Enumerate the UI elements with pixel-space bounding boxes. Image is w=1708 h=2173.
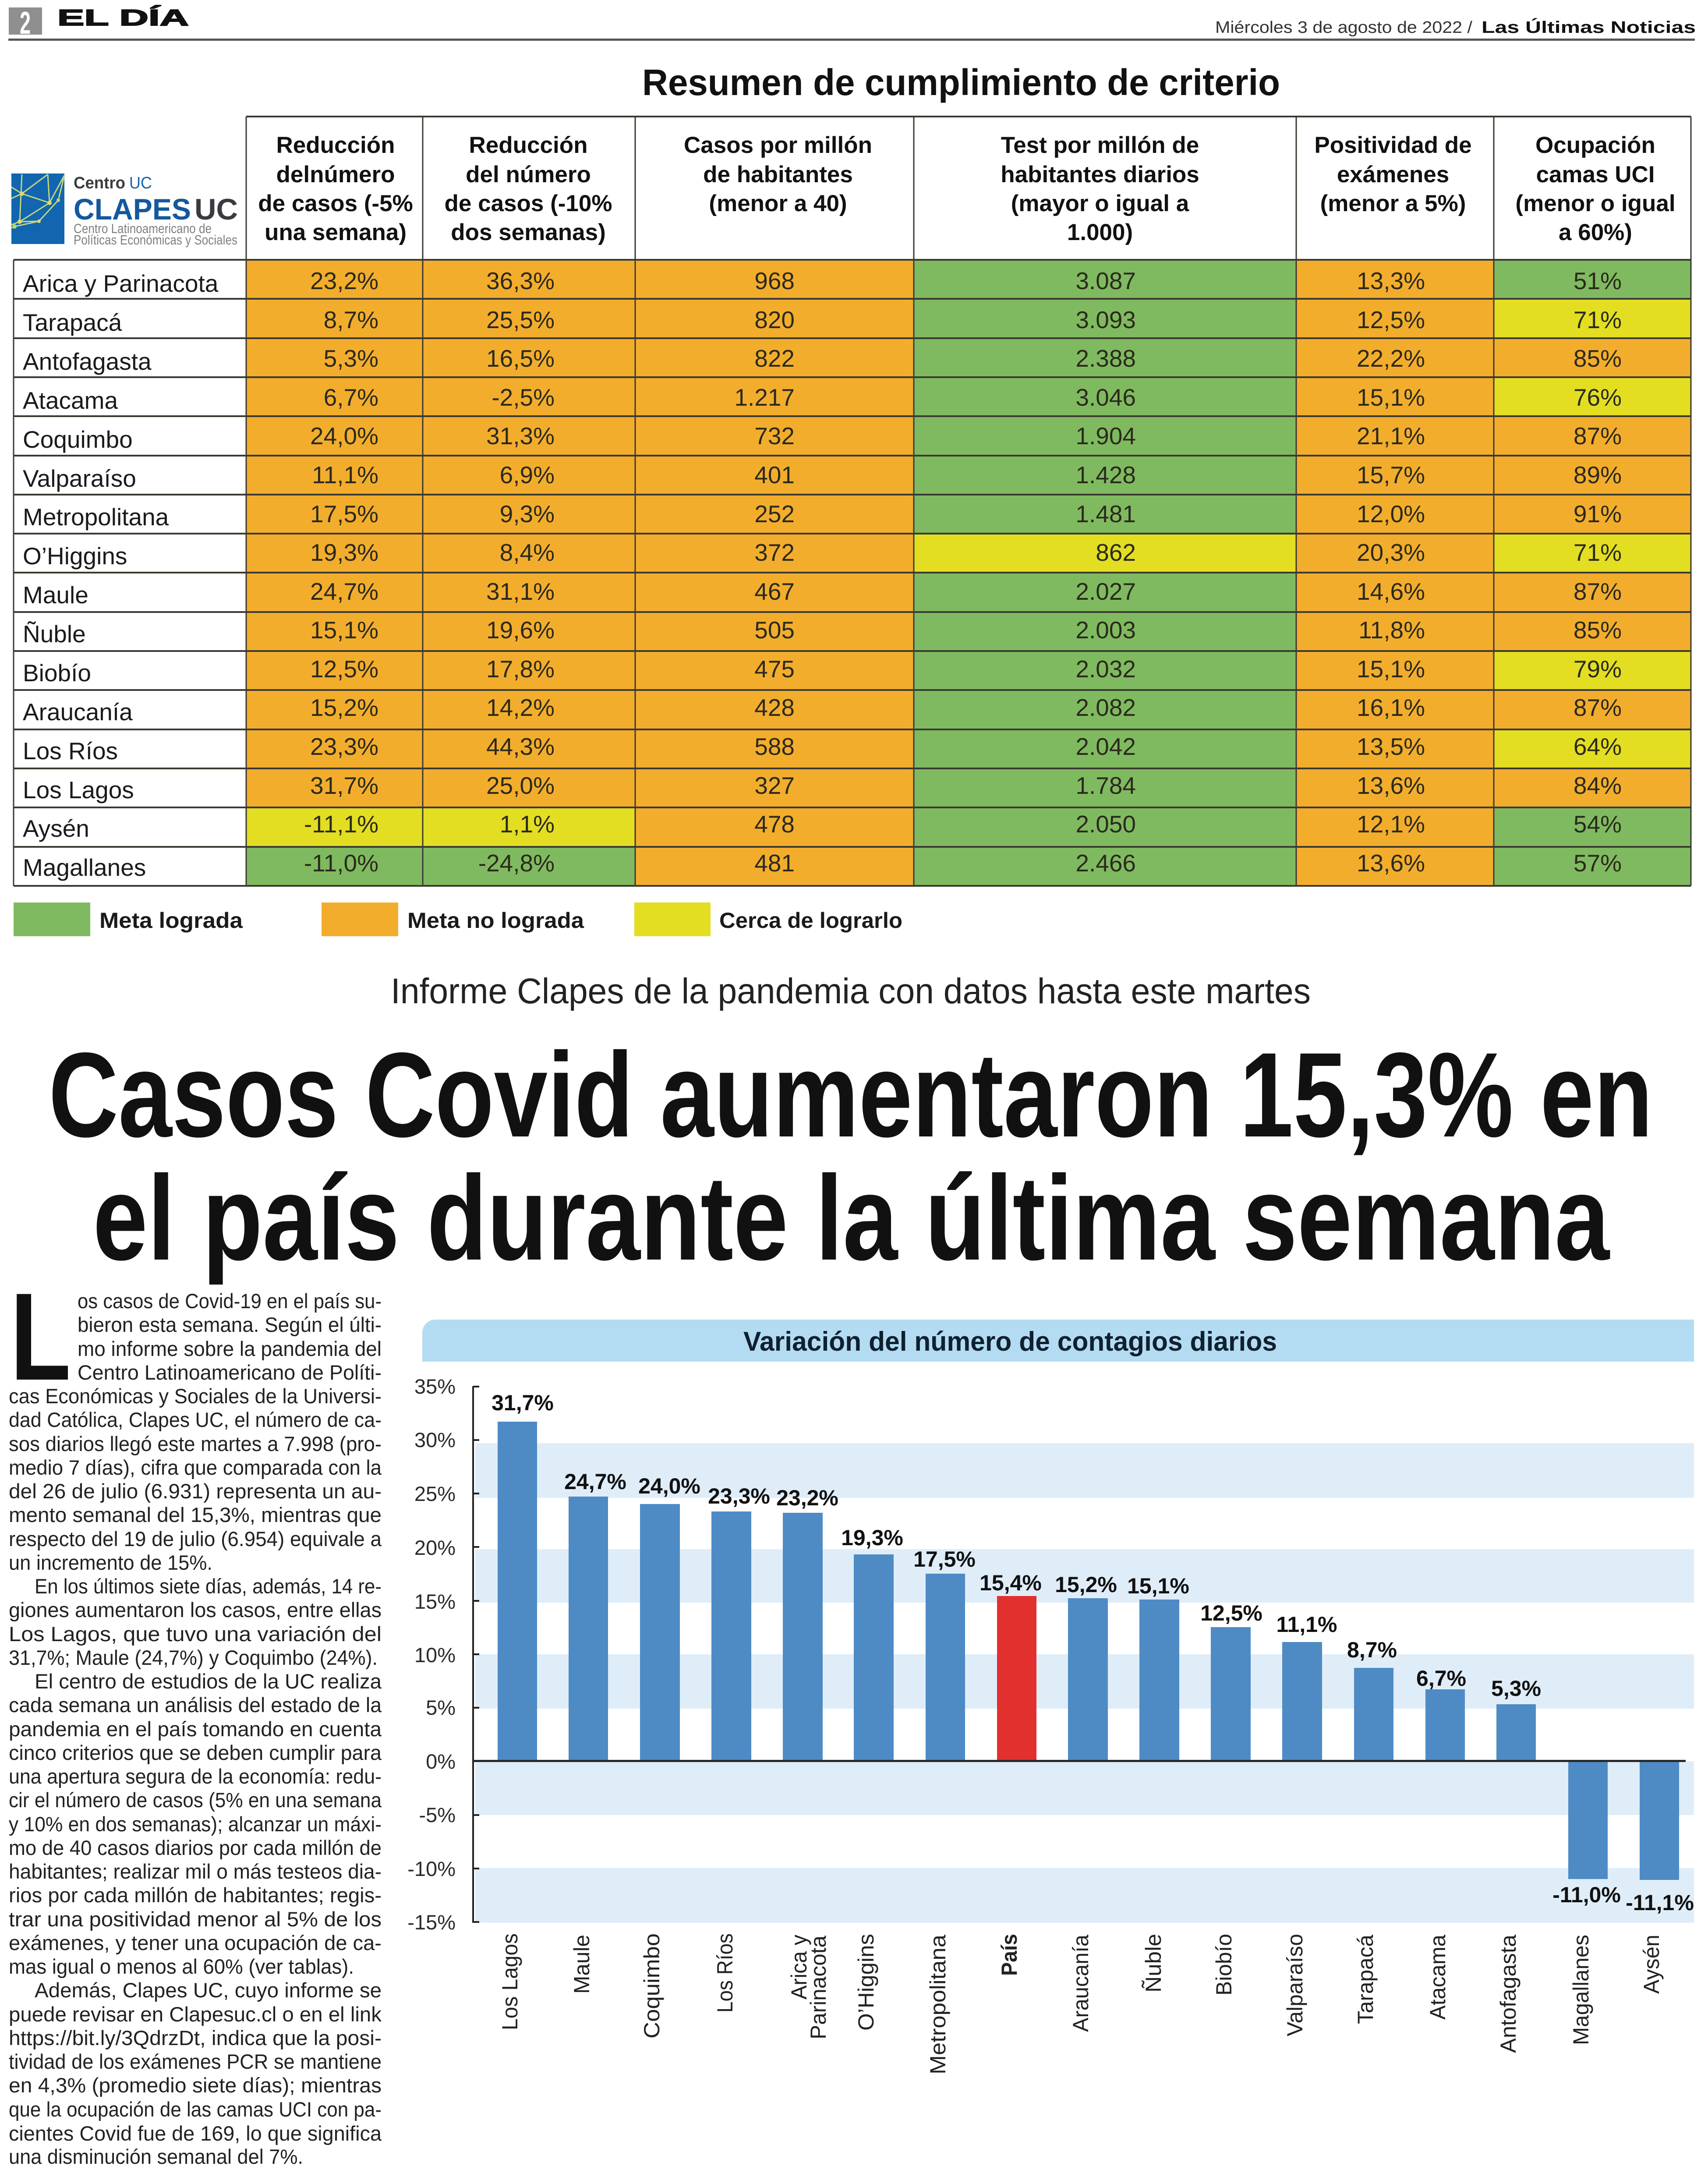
row: Arica y Parinacota: 968 xyxy=(754,267,795,294)
table headers: Test por millón de xyxy=(1001,132,1199,158)
logo: Clapes UC: Políticas Económicas y Sociales xyxy=(74,232,237,248)
row: Ñuble: 2.003 xyxy=(1075,616,1136,644)
y axis: 0% xyxy=(426,1750,456,1773)
value labels: 31,7% xyxy=(492,1391,554,1415)
category labels: Araucanía xyxy=(1068,1935,1093,2032)
paragraph 3: una apertura segura de la economía: redu- xyxy=(9,1765,382,1788)
value labels: 19,3% xyxy=(841,1525,903,1550)
background bands xyxy=(475,1443,1694,1923)
row: Los Lagos: 25,0% xyxy=(486,772,555,799)
row: Coquimbo: 1.904 xyxy=(1075,422,1136,449)
row: Arica y Parinacota: 23,2% xyxy=(310,267,378,294)
row: Aysén: Aysén xyxy=(23,815,89,842)
table headers: Casos por millón xyxy=(684,132,872,158)
row: Maule: 14,6% xyxy=(1357,578,1425,605)
chart: variation in daily infections xyxy=(407,1320,1694,2074)
logo mark xyxy=(11,173,64,244)
row: Metropolitana: Metropolitana xyxy=(23,503,169,531)
paragraph 4: en 4,3% (promedio siete días); mientras xyxy=(9,2074,382,2097)
row: Aysén: 12,1% xyxy=(1357,810,1425,838)
y axis: 5% xyxy=(426,1696,456,1719)
paragraph 3: mas igual o menos al 60% (ver tablas). xyxy=(9,1955,354,1978)
row: Metropolitana: 12,0% xyxy=(1357,500,1425,527)
logo: Clapes UC xyxy=(11,173,238,248)
table: criteria compliance by region xyxy=(14,117,1691,886)
row: Valparaíso: 11,1% xyxy=(312,461,378,488)
category labels: Tarapacá xyxy=(1353,1935,1378,2024)
paragraph 1: cas Económicas y Sociales de la Universi- xyxy=(9,1384,382,1408)
row: Aysén: 2.050 xyxy=(1075,810,1136,838)
paragraph 3: y 10% en dos semanas); alcanzar un máxi- xyxy=(9,1812,382,1836)
row: Valparaíso: 15,7% xyxy=(1357,461,1425,488)
paragraph 3 xyxy=(9,1670,382,1978)
row: Tarapacá: Tarapacá xyxy=(23,309,122,336)
value labels: 17,5% xyxy=(913,1547,976,1571)
paragraph 3: cinco criterios que se deben cumplir para xyxy=(9,1741,382,1764)
paragraph 1: mento semanal del 15,3%, mientras que xyxy=(9,1503,382,1526)
table headers: 1.000) xyxy=(1067,219,1133,245)
category labels: Arica y xyxy=(787,1935,811,2000)
row: Maule: 31,1% xyxy=(486,578,555,605)
row: Aysén: 478 xyxy=(754,810,795,838)
row: Araucanía xyxy=(23,694,1622,726)
paragraph 3: cir el número de casos (5% en una semana xyxy=(9,1788,382,1812)
category labels: Coquimbo xyxy=(640,1933,664,2039)
row: Ñuble: 505 xyxy=(754,616,795,644)
row: Maule: 2.027 xyxy=(1075,578,1136,605)
row: Coquimbo xyxy=(23,422,1622,453)
row: Los Ríos xyxy=(23,733,1622,764)
paragraph 3: trar una positividad menor al 5% de los xyxy=(9,1908,382,1931)
paragraph 2: En los últimos siete días, además, 14 re- xyxy=(35,1575,382,1598)
category labels: Metropolitana xyxy=(926,1935,950,2074)
row: Los Ríos: Los Ríos xyxy=(23,737,118,764)
row: Valparaíso xyxy=(23,461,1622,492)
paragraph 3: cada semana un análisis del estado de la xyxy=(9,1693,382,1716)
table headers: delnúmero xyxy=(276,162,395,188)
row: Antofagasta: 16,5% xyxy=(486,345,555,372)
legend: goal not achieved: Meta no lograda xyxy=(407,908,584,933)
row: Biobío: 475 xyxy=(754,655,795,683)
table title: Resumen de cumplimiento de criterio xyxy=(642,62,1280,103)
row: Metropolitana xyxy=(23,500,1622,531)
value labels: -11,0% xyxy=(1552,1883,1621,1907)
row: Maule: 87% xyxy=(1574,578,1622,605)
table headers: de casos (-5% xyxy=(258,191,413,216)
value labels: -11,1% xyxy=(1626,1890,1694,1915)
row: Los Ríos: 23,3% xyxy=(310,733,378,760)
page number box xyxy=(9,6,42,41)
value labels: 23,2% xyxy=(776,1486,838,1510)
row: Arica y Parinacota: 3.087 xyxy=(1075,267,1136,294)
table headers: Reducción xyxy=(469,132,587,158)
row: Coquimbo: Coquimbo xyxy=(23,426,133,453)
y axis xyxy=(407,1375,479,1934)
paragraph 1: medio 7 días), cifra que comparada con la xyxy=(9,1456,382,1479)
row: O'Higgins: 862 xyxy=(1096,539,1136,566)
row: Ñuble: 15,1% xyxy=(310,616,378,644)
y axis: -10% xyxy=(407,1857,456,1880)
headline xyxy=(49,1028,1653,1286)
table headers: de casos (-10% xyxy=(445,191,612,216)
legend: close to achieving xyxy=(634,902,902,936)
row: Atacama: 6,7% xyxy=(324,384,378,411)
category labels: Magallanes xyxy=(1569,1935,1593,2045)
value labels: 15,4% xyxy=(980,1571,1042,1595)
row: Coquimbo: 87% xyxy=(1574,422,1622,449)
row: Metropolitana: 17,5% xyxy=(310,500,378,527)
row: Valparaíso: 6,9% xyxy=(500,461,555,488)
legend: close to achieving: Cerca de lograrlo xyxy=(719,908,902,933)
category labels: Biobío xyxy=(1212,1934,1236,1996)
row: O'Higgins: 372 xyxy=(754,539,795,566)
row: O'Higgins: 8,4% xyxy=(500,539,555,566)
row: Los Ríos: 588 xyxy=(754,733,795,760)
row: Aysén: 1,1% xyxy=(500,810,555,838)
page number box: 2 xyxy=(20,6,31,41)
y axis: 20% xyxy=(414,1536,456,1559)
row: Biobío xyxy=(23,655,1622,687)
table headers: dos semanas) xyxy=(451,219,606,245)
row: Magallanes: 57% xyxy=(1574,849,1622,877)
row: Atacama: Atacama xyxy=(23,387,118,414)
row: Magallanes: 13,6% xyxy=(1357,849,1425,877)
category labels: Los Lagos xyxy=(498,1933,522,2030)
row: Antofagasta: 22,2% xyxy=(1357,345,1425,372)
category labels: O’Higgins xyxy=(854,1934,878,2031)
paragraph 4 xyxy=(9,1978,382,2168)
row: Araucanía: 15,2% xyxy=(310,694,378,721)
table headers: (menor a 5%) xyxy=(1320,191,1466,216)
row: Araucanía: 87% xyxy=(1574,694,1622,721)
row: Magallanes: Magallanes xyxy=(23,854,146,881)
row: Atacama: 15,1% xyxy=(1357,384,1425,411)
paragraph 1: respecto del 19 de julio (6.954) equivale a xyxy=(9,1527,382,1550)
category labels: Valparaíso xyxy=(1283,1934,1307,2036)
row: Aysén: -11,1% xyxy=(304,810,378,838)
section name: EL DÍA xyxy=(57,5,189,31)
row: Ñuble: 85% xyxy=(1574,616,1622,644)
legend: goal not achieved xyxy=(322,902,584,936)
row: Arica y Parinacota: 36,3% xyxy=(486,267,555,294)
row: Los Ríos: 13,5% xyxy=(1357,733,1425,760)
category labels: País xyxy=(997,1934,1022,1976)
row: Coquimbo: 732 xyxy=(754,422,795,449)
table headers: del número xyxy=(466,162,591,188)
row: Biobío: 79% xyxy=(1574,655,1622,683)
row: Biobío: 12,5% xyxy=(310,655,378,683)
paragraph 3: habitantes; realizar mil o más testeos dia- xyxy=(9,1860,382,1883)
row: Coquimbo: 24,0% xyxy=(310,422,378,449)
row: Tarapacá: 25,5% xyxy=(486,306,555,333)
paragraph 1: del 26 de julio (6.931) representa un au- xyxy=(9,1479,382,1503)
value labels: 23,3% xyxy=(708,1484,770,1508)
row: Antofagasta: 2.388 xyxy=(1075,345,1136,372)
table headers: Ocupación xyxy=(1535,132,1655,158)
row: Biobío: 17,8% xyxy=(486,655,555,683)
row: Tarapacá: 820 xyxy=(754,306,795,333)
row: Atacama xyxy=(23,384,1622,414)
category labels xyxy=(498,1933,1664,2074)
value labels: 24,0% xyxy=(638,1474,700,1498)
row: Los Lagos: Los Lagos xyxy=(23,776,134,803)
row: Maule: 467 xyxy=(754,578,795,605)
status colour fills xyxy=(246,260,1691,886)
y axis: 15% xyxy=(414,1590,456,1613)
value labels: 6,7% xyxy=(1416,1666,1466,1691)
paragraph 3: rios por cada millón de habitantes; regis- xyxy=(9,1883,382,1907)
paragraph 2 xyxy=(9,1575,382,1669)
table headers: una semana) xyxy=(265,219,407,245)
row: Tarapacá: 3.093 xyxy=(1075,306,1136,333)
row: Araucanía: 2.082 xyxy=(1075,694,1136,721)
paragraph 3: pandemia en el país tomando en cuenta xyxy=(9,1717,382,1741)
paragraph 2: Los Lagos, que tuvo una variación del xyxy=(9,1622,382,1646)
row: Atacama: 1.217 xyxy=(734,384,795,411)
category labels: Maule xyxy=(569,1935,594,1994)
row: Tarapacá xyxy=(23,306,1622,336)
paragraph 1: sos diarios llegó este martes a 7.998 (pro- xyxy=(9,1432,382,1455)
table headers: camas UCI xyxy=(1536,162,1655,188)
row: Valparaíso: 1.428 xyxy=(1075,461,1136,488)
row: Metropolitana: 252 xyxy=(754,500,795,527)
paragraph 4: https://bit.ly/3QdrzDt, indica que la posi- xyxy=(9,2026,382,2049)
row: Los Lagos: 1.784 xyxy=(1075,772,1136,799)
table headers: exámenes xyxy=(1337,162,1449,188)
row: Magallanes xyxy=(23,849,1622,881)
legend: goal achieved: Meta lograda xyxy=(99,908,243,933)
row: Los Lagos: 84% xyxy=(1574,772,1622,799)
y axis: -15% xyxy=(407,1911,456,1934)
row: Valparaíso: 89% xyxy=(1574,461,1622,488)
row: Los Lagos: 31,7% xyxy=(310,772,378,799)
row: Arica y Parinacota: Arica y Parinacota xyxy=(23,270,219,297)
table headers: de habitantes xyxy=(703,162,853,188)
row: Antofagasta xyxy=(23,345,1622,375)
row: Arica y Parinacota: 13,3% xyxy=(1357,267,1425,294)
newspaper page header xyxy=(8,5,1696,41)
logo: Clapes UC: Centro Latinoamericano de xyxy=(74,221,212,236)
paragraph 1: bieron esta semana. Según el últi- xyxy=(78,1313,382,1336)
row: Maule xyxy=(23,578,1622,609)
paragraph 4: tividad de los exámenes PCR se mantiene xyxy=(9,2050,382,2073)
row: Antofagasta: 5,3% xyxy=(324,345,378,372)
bars xyxy=(498,1422,1679,1880)
row: O'Higgins: 71% xyxy=(1574,539,1622,566)
y axis: 35% xyxy=(414,1375,456,1398)
row: Arica y Parinacota xyxy=(23,267,1622,297)
article body text xyxy=(9,1267,382,2168)
value labels: 11,1% xyxy=(1276,1612,1337,1637)
row: Araucanía: Araucanía xyxy=(23,698,133,726)
row: Atacama: 3.046 xyxy=(1075,384,1136,411)
row: O'Higgins: 19,3% xyxy=(310,539,378,566)
value labels: 8,7% xyxy=(1347,1638,1397,1662)
row: Biobío: Biobío xyxy=(23,659,91,687)
table headers: (menor o igual xyxy=(1515,191,1676,216)
row: Ñuble: 19,6% xyxy=(486,616,555,644)
row: Atacama: 76% xyxy=(1574,384,1622,411)
row: Antofagasta: Antofagasta xyxy=(23,348,152,375)
row: Araucanía: 428 xyxy=(754,694,795,721)
paragraph 1: os casos de Covid-19 en el país su- xyxy=(78,1289,382,1313)
row: Biobío: 2.032 xyxy=(1075,655,1136,683)
table headers: Reducción xyxy=(276,132,395,158)
paragraph 2: 31,7%; Maule (24,7%) y Coquimbo (24%). xyxy=(9,1646,378,1669)
logo: Clapes UC: UC xyxy=(129,174,152,192)
paragraph 1: dad Católica, Clapes UC, el número de ca- xyxy=(9,1408,382,1431)
paragraph 3: mo de 40 casos diarios por cada millón de xyxy=(9,1836,382,1859)
value labels: 5,3% xyxy=(1491,1676,1541,1701)
row: Tarapacá: 8,7% xyxy=(324,306,378,333)
row: Ñuble: Ñuble xyxy=(23,620,86,648)
row: Ñuble: 11,8% xyxy=(1358,616,1425,644)
category labels: Antofagasta xyxy=(1496,1935,1521,2053)
legend xyxy=(14,902,902,936)
row: Coquimbo: 31,3% xyxy=(486,422,555,449)
publication date: Miércoles 3 de agosto de 2022 / xyxy=(1215,18,1472,37)
row: Metropolitana: 9,3% xyxy=(500,500,555,527)
paragraph 1: mo informe sobre la pandemia del xyxy=(78,1337,382,1360)
row: Maule: 24,7% xyxy=(310,578,378,605)
table headers: (menor a 40) xyxy=(709,191,847,216)
row: O'Higgins: O’Higgins xyxy=(23,542,127,570)
row: Los Ríos: 2.042 xyxy=(1075,733,1136,760)
row: Maule: Maule xyxy=(23,581,88,609)
row: Aysén: 54% xyxy=(1574,810,1622,838)
row: Aysén xyxy=(23,810,1622,842)
value labels: 15,2% xyxy=(1055,1572,1117,1597)
paragraph 4: Además, Clapes UC, cuyo informe se xyxy=(35,1978,382,2002)
category labels: Parinacota xyxy=(806,1936,831,2039)
category labels: Los Ríos xyxy=(713,1933,737,2013)
paragraph 2: giones aumentaron los casos, entre ellas xyxy=(9,1598,382,1621)
kicker: Informe Clapes de la pandemia con datos hasta este martes xyxy=(391,971,1311,1011)
y axis: 25% xyxy=(414,1482,456,1505)
row: Antofagasta: 85% xyxy=(1574,345,1622,372)
row: Valparaíso: 401 xyxy=(754,461,795,488)
row: Magallanes: 2.466 xyxy=(1075,849,1136,877)
chart title band xyxy=(422,1320,1694,1362)
row: Arica y Parinacota: 51% xyxy=(1574,267,1622,294)
paragraph 1: un incremento de 15%. xyxy=(9,1551,212,1574)
paragraph 3: El centro de estudios de la UC realiza xyxy=(35,1670,382,1693)
legend: goal achieved xyxy=(14,902,243,936)
row: Metropolitana: 91% xyxy=(1574,500,1622,527)
category labels: Ñuble xyxy=(1141,1934,1166,1993)
row: Atacama: -2,5% xyxy=(492,384,555,411)
value labels: 12,5% xyxy=(1200,1601,1262,1625)
logo: Clapes UC: Centro xyxy=(74,174,125,192)
paragraph 1: Centro Latinoamericano de Políti- xyxy=(78,1361,382,1384)
paragraph 4: puede revisar en Clapesuc.cl o en el link xyxy=(9,2003,382,2026)
paragraph 1 xyxy=(9,1289,382,1574)
row: Ñuble xyxy=(23,616,1622,648)
row: Valparaíso: Valparaíso xyxy=(23,465,136,492)
paragraph 3: exámenes, y tener una ocupación de ca- xyxy=(9,1931,382,1954)
row: O'Higgins: 20,3% xyxy=(1357,539,1425,566)
logo: Clapes UC: CLAPES xyxy=(74,193,191,226)
logo: Clapes UC: UC xyxy=(194,193,238,226)
row: Los Ríos: 64% xyxy=(1574,733,1622,760)
row: Magallanes: -11,0% xyxy=(304,849,378,877)
paragraph 4: que la ocupación de las camas UCI con pa- xyxy=(9,2098,382,2121)
row: Antofagasta: 822 xyxy=(754,345,795,372)
y axis: 30% xyxy=(414,1428,456,1451)
y axis: -5% xyxy=(419,1803,456,1826)
row: Biobío: 15,1% xyxy=(1357,655,1425,683)
value labels xyxy=(492,1391,1694,1915)
publication name: Las Últimas Noticias xyxy=(1482,18,1696,37)
row: Los Ríos: 44,3% xyxy=(486,733,555,760)
row: Araucanía: 16,1% xyxy=(1357,694,1425,721)
value labels: 24,7% xyxy=(564,1469,626,1494)
table headers: (mayor o igual a xyxy=(1011,191,1189,216)
paragraph 4: una disminución semanal del 7%. xyxy=(9,2145,303,2168)
row: Los Lagos xyxy=(23,772,1622,803)
paragraph 4: cientes Covid fue de 169, lo que significa xyxy=(9,2122,382,2145)
row: Magallanes: 481 xyxy=(754,849,795,877)
row: Tarapacá: 71% xyxy=(1574,306,1622,333)
row: Los Lagos: 327 xyxy=(754,772,795,799)
row: Metropolitana: 1.481 xyxy=(1075,500,1136,527)
category labels: Aysén xyxy=(1639,1935,1664,1994)
row: Tarapacá: 12,5% xyxy=(1357,306,1425,333)
table headers: a 60%) xyxy=(1559,219,1632,245)
row: O'Higgins xyxy=(23,539,1622,570)
table headers: Positividad de xyxy=(1314,132,1472,158)
value labels: 15,1% xyxy=(1127,1574,1189,1598)
table headers: habitantes diarios xyxy=(1001,162,1199,188)
row: Magallanes: -24,8% xyxy=(478,849,555,877)
row: Los Lagos: 13,6% xyxy=(1357,772,1425,799)
row: Araucanía: 14,2% xyxy=(486,694,555,721)
category labels: Atacama xyxy=(1425,1935,1450,2020)
y axis: 10% xyxy=(414,1643,456,1667)
drop cap: L xyxy=(10,1267,71,1406)
row: Coquimbo: 21,1% xyxy=(1357,422,1425,449)
chart title band: Variación del número de contagios diarios xyxy=(743,1327,1277,1357)
table headers xyxy=(246,117,1691,260)
